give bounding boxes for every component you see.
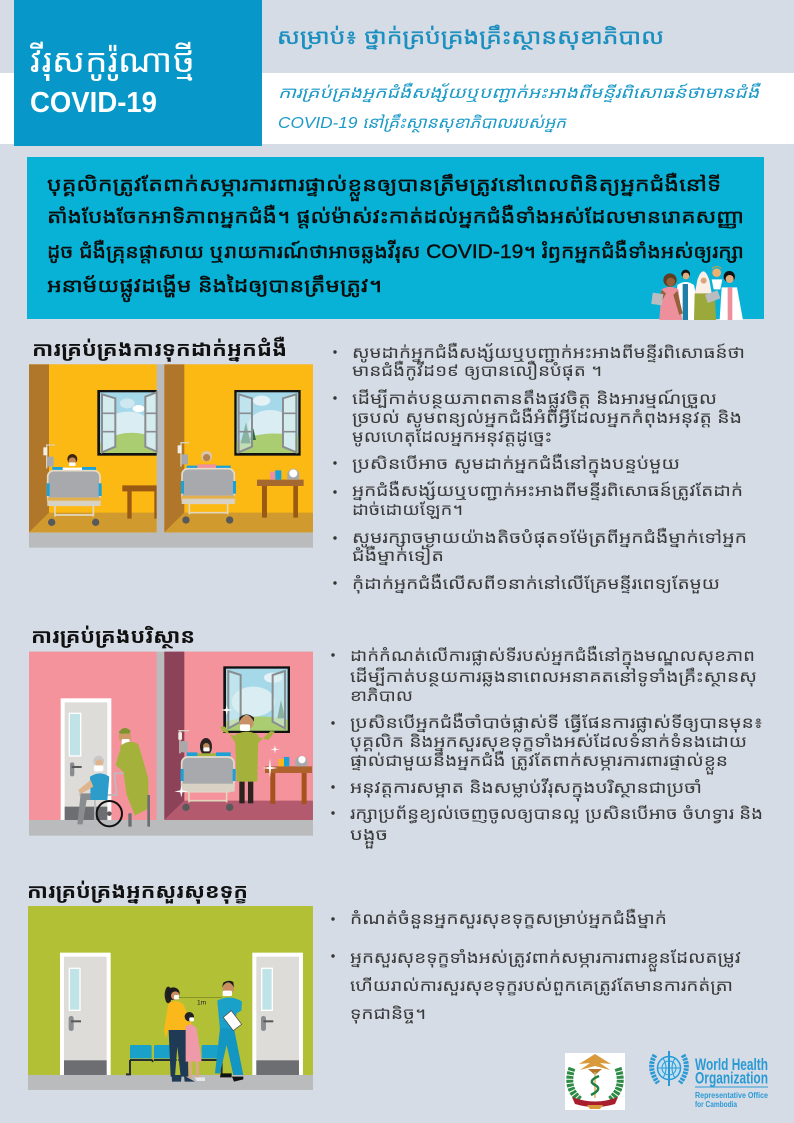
list: environment: រក្សាប្រព័ន្ធខ្យល់ចេញចូលឲ្យបានល្អ ប្រសិនបើអាច ចំហទ្វារ និង	[350, 803, 763, 823]
list: patient placement: មូលហេតុដែលអ្នកអនុវត្តដូច្នេះ	[352, 427, 552, 447]
subtitle	[278, 83, 762, 132]
one metre distance marker: 1m	[197, 999, 207, 1006]
logo: Ministry of Health	[565, 1053, 625, 1110]
woman visitor	[164, 987, 195, 1082]
list: environment	[331, 645, 763, 849]
list: patient placement: សូមរក្សាចម្ងាយយ៉ាងតិចបំផុត១ម៉ែត្រពីអ្នកជំងឺម្នាក់ទៅអ្នក	[352, 527, 747, 548]
title panel	[14, 0, 262, 146]
bedside table: right room	[257, 469, 304, 518]
logo: World Health Organization: Organization	[695, 1070, 768, 1088]
list: environment: បង្អួច	[350, 827, 388, 849]
icon: health workers group	[651, 266, 743, 320]
window: left room	[97, 390, 157, 456]
heading: visitors: ការគ្រប់គ្រងអ្នកសួរសុខទុក្ខ	[27, 881, 248, 905]
title panel: វីរុសកូរ៉ូណាថ្មី	[29, 41, 195, 81]
list: patient placement: ច្របល់ សូមពន្យល់អ្នកជំងឺអំពីអ្វីដែលអ្នកកំពុងអនុវត្ត និង	[352, 407, 742, 428]
illustration: isolation rooms	[29, 364, 313, 548]
logo: World Health Organization: Representative Office	[695, 1091, 768, 1100]
patient in bed	[178, 731, 236, 811]
patient bed: right room	[178, 443, 236, 524]
attendant in green gown	[116, 728, 150, 827]
door	[61, 698, 111, 820]
logo: World Health Organization: for Cambodia	[695, 1100, 737, 1109]
list: patient placement: ដើម្បីកាត់បន្ថយភាពតានតឹងផ្លូវចិត្ត និងអារម្មណ៍ច្រួល	[352, 387, 717, 413]
list: environment: ដាក់កំណត់លើការផ្លាស់ទីរបស់អ្នកជំងឺនៅក្នុងមណ្ឌលសុខភាព	[350, 645, 755, 671]
list: patient placement: ជំងឺម្នាក់ទៀត	[352, 545, 444, 565]
heading: patient placement: ការគ្រប់គ្រងការទុកដាក់អ្នកជំងឺ	[32, 336, 287, 363]
window	[223, 666, 290, 733]
subtitle: COVID-19 នៅគ្រឹះស្ថានសុខាភិបាលរបស់អ្នក	[278, 113, 567, 132]
patient bed: left room	[43, 445, 102, 526]
list: environment: អនុវត្តការសម្អាត និងសម្លាប់វីរុសក្នុងបរិស្ថានជាប្រចាំ	[350, 777, 702, 803]
list: environment: ខាភិបាល	[350, 686, 413, 705]
cleaner in green gown	[220, 714, 275, 803]
callout: protective equipment message: បុគ្គលិកត្រូវតែពាក់សម្ភារការពារផ្ទាល់ខ្លួនឲ្យបានត្រឹមត្រូវនៅពេលពិនិត្យអ្នកជំងឺនៅទី	[47, 173, 721, 202]
list: environment: ប្រសិនបើអ្នកជំងឺចាំបាច់ផ្លាស់ទី ធ្វើផែនការផ្លាស់ទីឲ្យបានមុន៖	[350, 712, 763, 733]
list: visitors: អ្នកសួរសុខទុក្ខទាំងអស់ត្រូវពាក់សម្ភារការពារខ្លួនដែលតម្រូវ	[350, 947, 741, 972]
heading: environment: ការគ្រប់គ្រងបរិស្ថាន	[31, 626, 195, 649]
list: visitors: ហើយរាល់ការសួរសុខទុក្ខរបស់ពួកគេត្រូវតែមានការកត់ត្រា	[350, 975, 733, 996]
title panel: COVID-19	[30, 87, 157, 119]
child visitor	[185, 1012, 205, 1081]
door: right	[252, 953, 303, 1075]
door: left	[60, 953, 111, 1075]
logo: World Health Organization: World Health	[695, 1056, 768, 1074]
list: patient placement: ដាច់ដោយឡែក។	[352, 499, 463, 519]
health worker	[215, 981, 243, 1082]
one metre distance marker	[179, 997, 222, 1006]
bedside table: left room	[122, 485, 157, 519]
callout: protective equipment message: ដូច ជំងឺគ្រុនផ្តាសាយ ឬរាយការណ៍ថាអាចឆ្លងវីរុស COVID-19។ រំឭកអ្នកជំងឺទាំងអស់ឲ្យរក្សា	[47, 239, 744, 264]
illustration: visitors in corridor	[28, 906, 313, 1090]
list: patient placement	[333, 341, 747, 594]
list: environment: បុគ្គលិក និងអ្នកសួរសុខទុក្ខទាំងអស់ដែលទំនាក់ទំនងដោយ	[350, 731, 747, 752]
callout: protective equipment message: អនាម័យផ្លូវដង្ហើម និងដៃឲ្យបានត្រឹមត្រូវ។	[47, 274, 382, 303]
audience heading: សម្រាប់៖ ថ្នាក់គ្រប់គ្រងគ្រឹះស្ថានសុខាភិបាល	[277, 26, 664, 51]
list: patient placement: សូមដាក់អ្នកជំងឺសង្ស័យឬបញ្ជាក់អះអាងពីមន្ទីរពិសោធន៍ថា	[352, 341, 745, 362]
list: visitors: ទុកជានិច្ច។	[350, 1004, 426, 1024]
illustration: environmental cleaning	[29, 652, 313, 836]
window: right room	[234, 390, 301, 456]
list: patient placement: ប្រសិនបើអាច សូមដាក់អ្នកជំងឺនៅក្នុងបន្ទប់មួយ	[352, 453, 680, 479]
waiting chairs	[126, 1045, 222, 1074]
subtitle: ការគ្រប់គ្រងអ្នកជំងឺសង្ស័យឬបញ្ជាក់អះអាងពីមន្ទីរពិសោធន៍ថាមានជំងឺ	[278, 83, 762, 102]
table with supplies	[265, 756, 312, 804]
callout: protective equipment message: តាំងបែងចែកអាទិភាពអ្នកជំងឺ។ ផ្តល់ម៉ាស់វះកាត់ដល់អ្នកជំងឺទាំងអស់ដែលមានរោគសញ្ញា	[47, 205, 744, 228]
wheelchair patient	[73, 756, 126, 826]
sparkles	[174, 705, 280, 798]
list: environment: ផ្ទាល់ជាមួយនឹងអ្នកជំងឺ ត្រូវតែពាក់សម្ភារការពារផ្ទាល់ខ្លួន	[350, 750, 728, 775]
list: patient placement: មានជំងឺកូវីដ១៩ ឲ្យបានលឿនបំផុត ។	[352, 360, 602, 381]
list: patient placement: អ្នកជំងឺសង្ស័យឬបញ្ជាក់អះអាងពីមន្ទីរពិសោធន៍ត្រូវតែដាក់	[352, 479, 743, 500]
list: visitors	[331, 908, 741, 1024]
list: patient placement: កុំដាក់អ្នកជំងឺលើសពី១នាក់នៅលើគ្រែមន្ទីរពេទ្យតែមួយ	[352, 573, 720, 594]
list: visitors: កំណត់ចំនួនអ្នកសួរសុខទុក្ខសម្រាប់អ្នកជំងឺម្នាក់	[350, 908, 667, 929]
logo: World Health Organization	[652, 1051, 768, 1109]
callout: protective equipment message	[27, 157, 764, 320]
list: environment: ដើម្បីកាត់បន្ថយការឆ្លងនាពេលអនាគតនៅទូទាំងគ្រឹះស្ថានសុ	[350, 666, 757, 687]
